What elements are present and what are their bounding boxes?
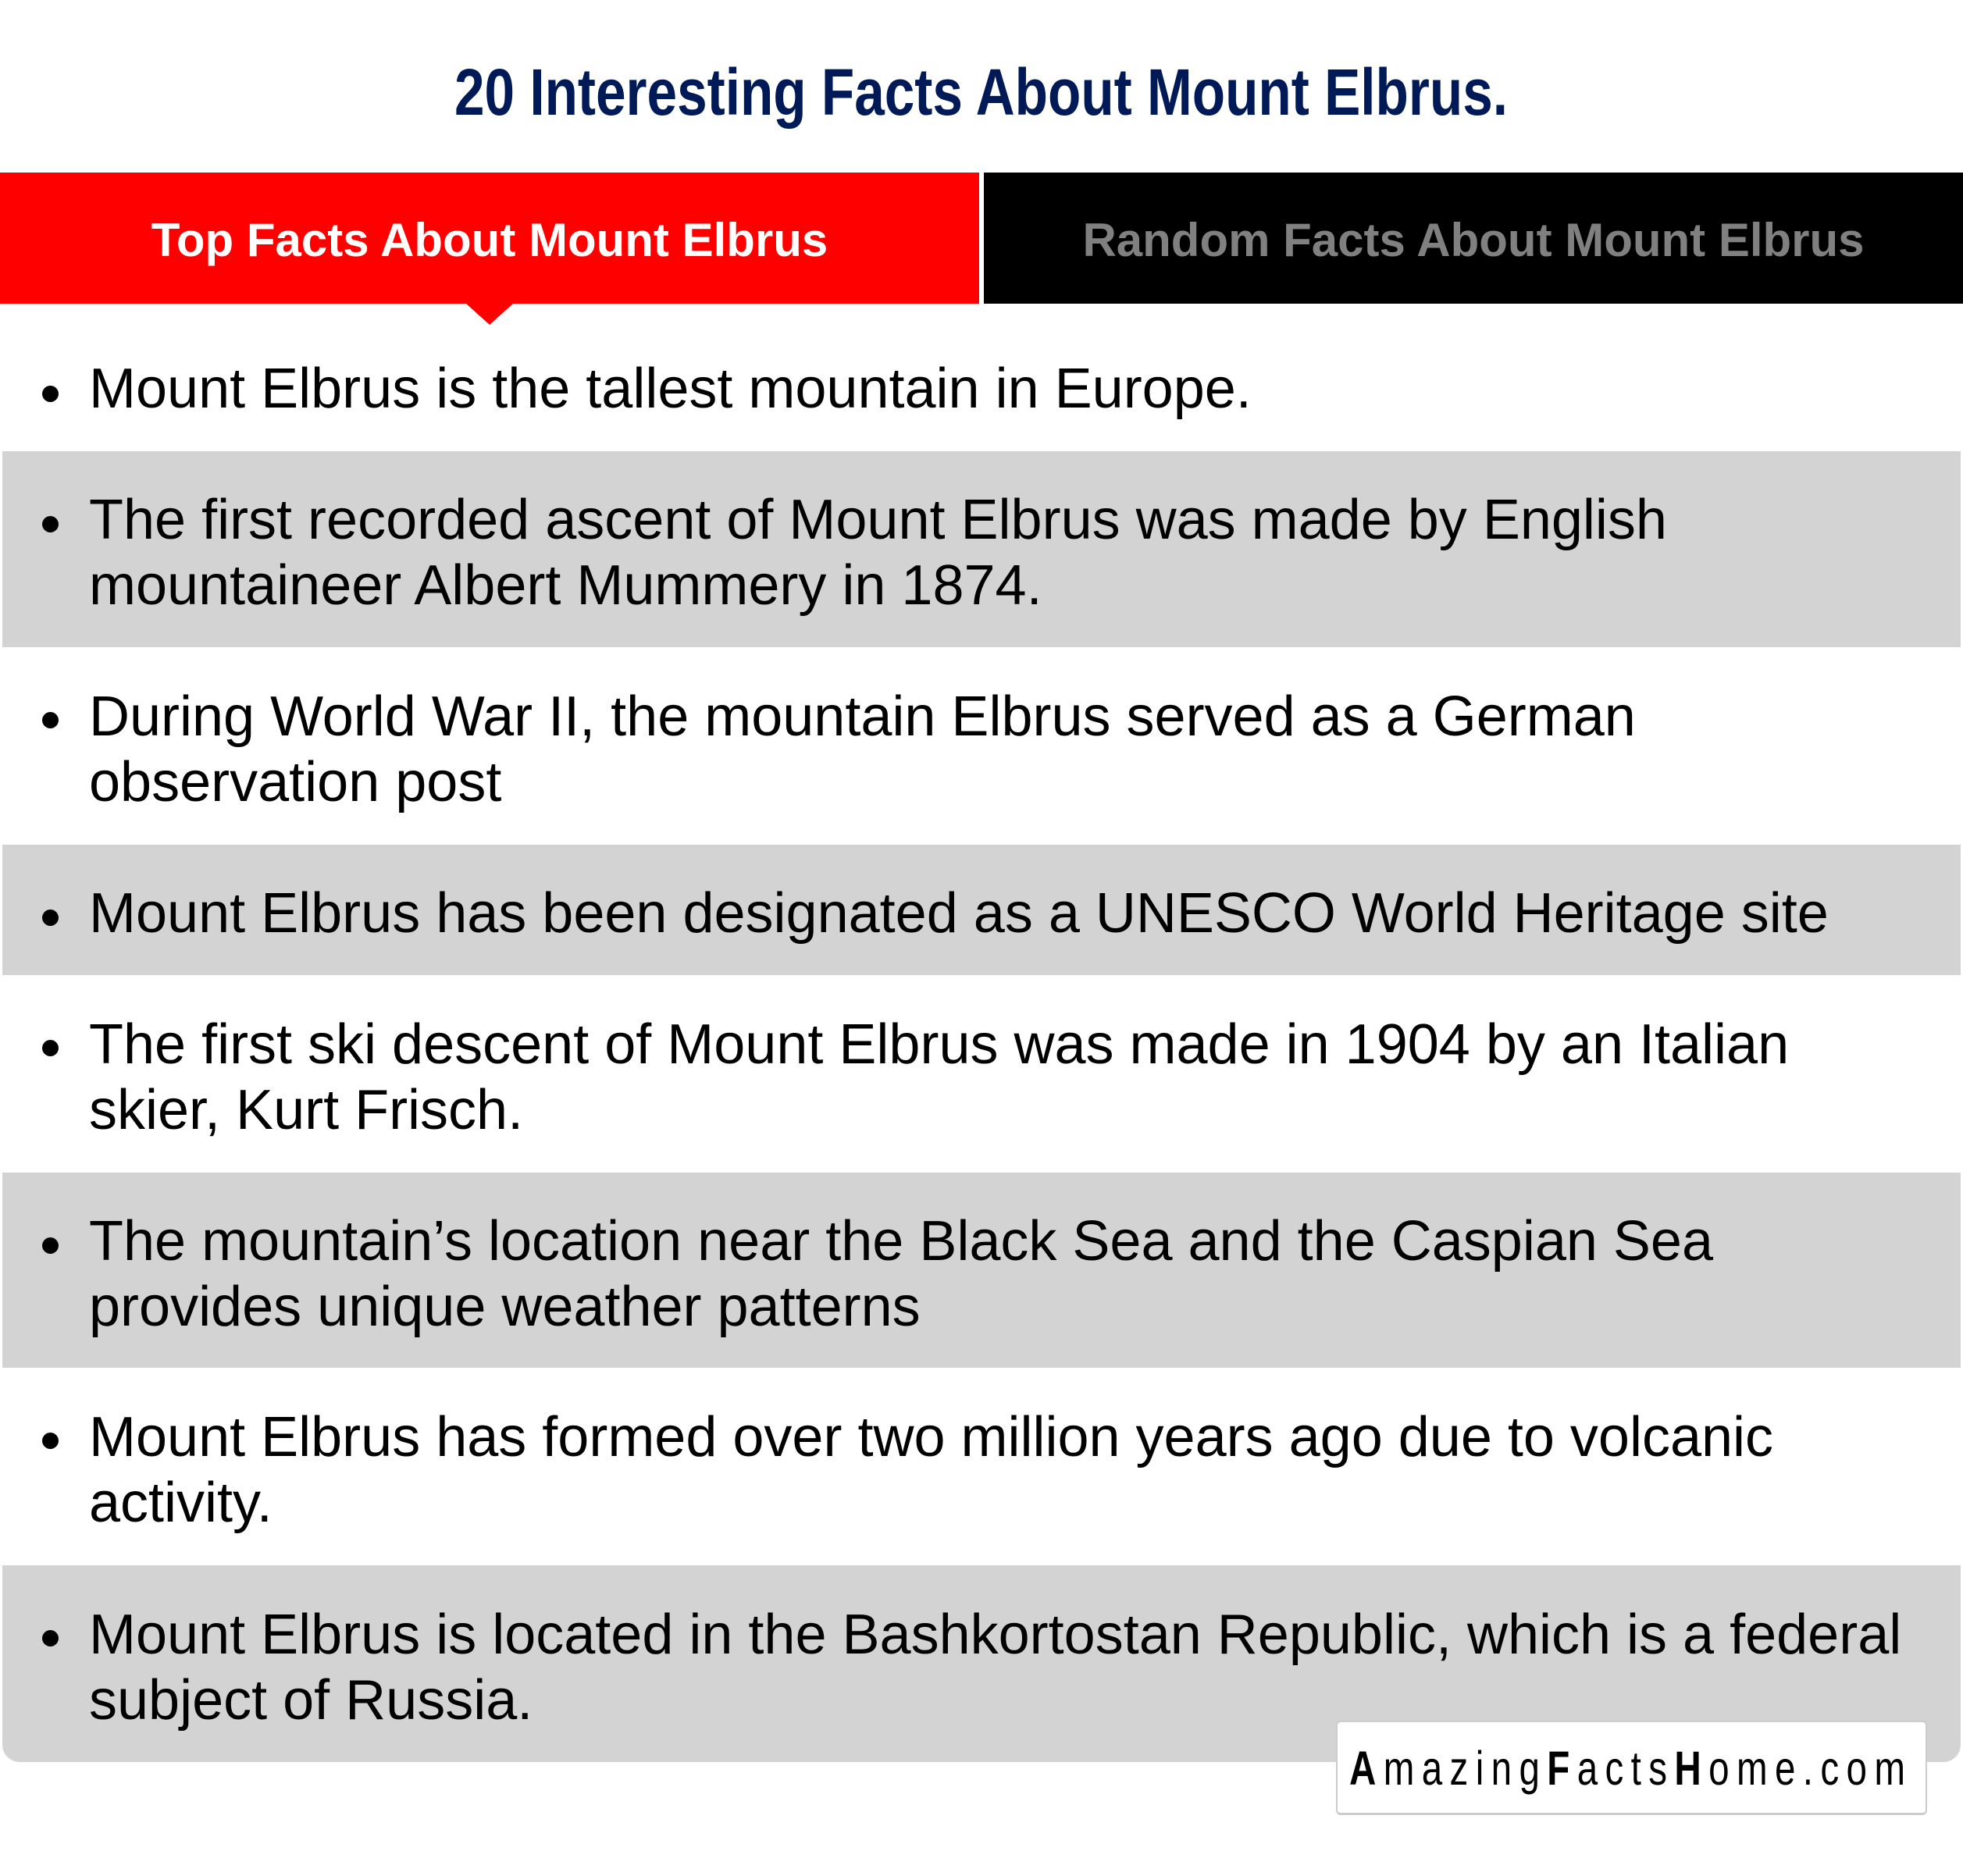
fact 5	[42, 1013, 1789, 1141]
fact 8: Mount Elbrus is located in the Bashkortostan Republic, which is a federal	[89, 1604, 1901, 1666]
fact 3: observation post	[89, 751, 501, 813]
fact 7	[42, 1406, 1773, 1534]
fact 6: provides unique weather patterns	[89, 1276, 921, 1338]
watermark badge: AmazingFactsHome.com	[1349, 1742, 1912, 1795]
fact 2: mountaineer Albert Mummery in 1874.	[89, 554, 1042, 617]
fact 6	[2, 1173, 1961, 1368]
fact 4: Mount Elbrus has been designated as a UNESCO World Heritage site	[89, 882, 1829, 945]
fact 2	[2, 451, 1961, 647]
tab: random facts	[984, 173, 1963, 304]
tab: top facts: Top Facts About Mount Elbrus	[151, 214, 828, 266]
fact 4	[2, 845, 1961, 975]
fact 5: The first ski descent of Mount Elbrus was made in 1904 by an Italian	[89, 1013, 1789, 1076]
tab: random facts: Random Facts About Mount Elbrus	[1082, 214, 1865, 266]
tab pointer arrow	[466, 304, 513, 325]
fact 1: Mount Elbrus is the tallest mountain in Europe.	[89, 358, 1252, 420]
fact 3	[42, 685, 1636, 813]
fact 3: During World War II, the mountain Elbrus served as a German	[89, 685, 1636, 748]
fact 8: subject of Russia.	[89, 1669, 533, 1732]
fact 5: skier, Kurt Frisch.	[89, 1079, 523, 1141]
fact 6: The mountain’s location near the Black Sea and the Caspian Sea	[89, 1210, 1713, 1273]
fact 7: activity.	[89, 1472, 273, 1534]
fact 2: The first recorded ascent of Mount Elbrus was made by English	[89, 489, 1667, 551]
fact 8	[2, 1565, 1961, 1762]
watermark badge	[1336, 1721, 1927, 1815]
tab: top facts	[0, 173, 979, 304]
fact 7: Mount Elbrus has formed over two million years ago due to volcanic	[89, 1406, 1773, 1468]
